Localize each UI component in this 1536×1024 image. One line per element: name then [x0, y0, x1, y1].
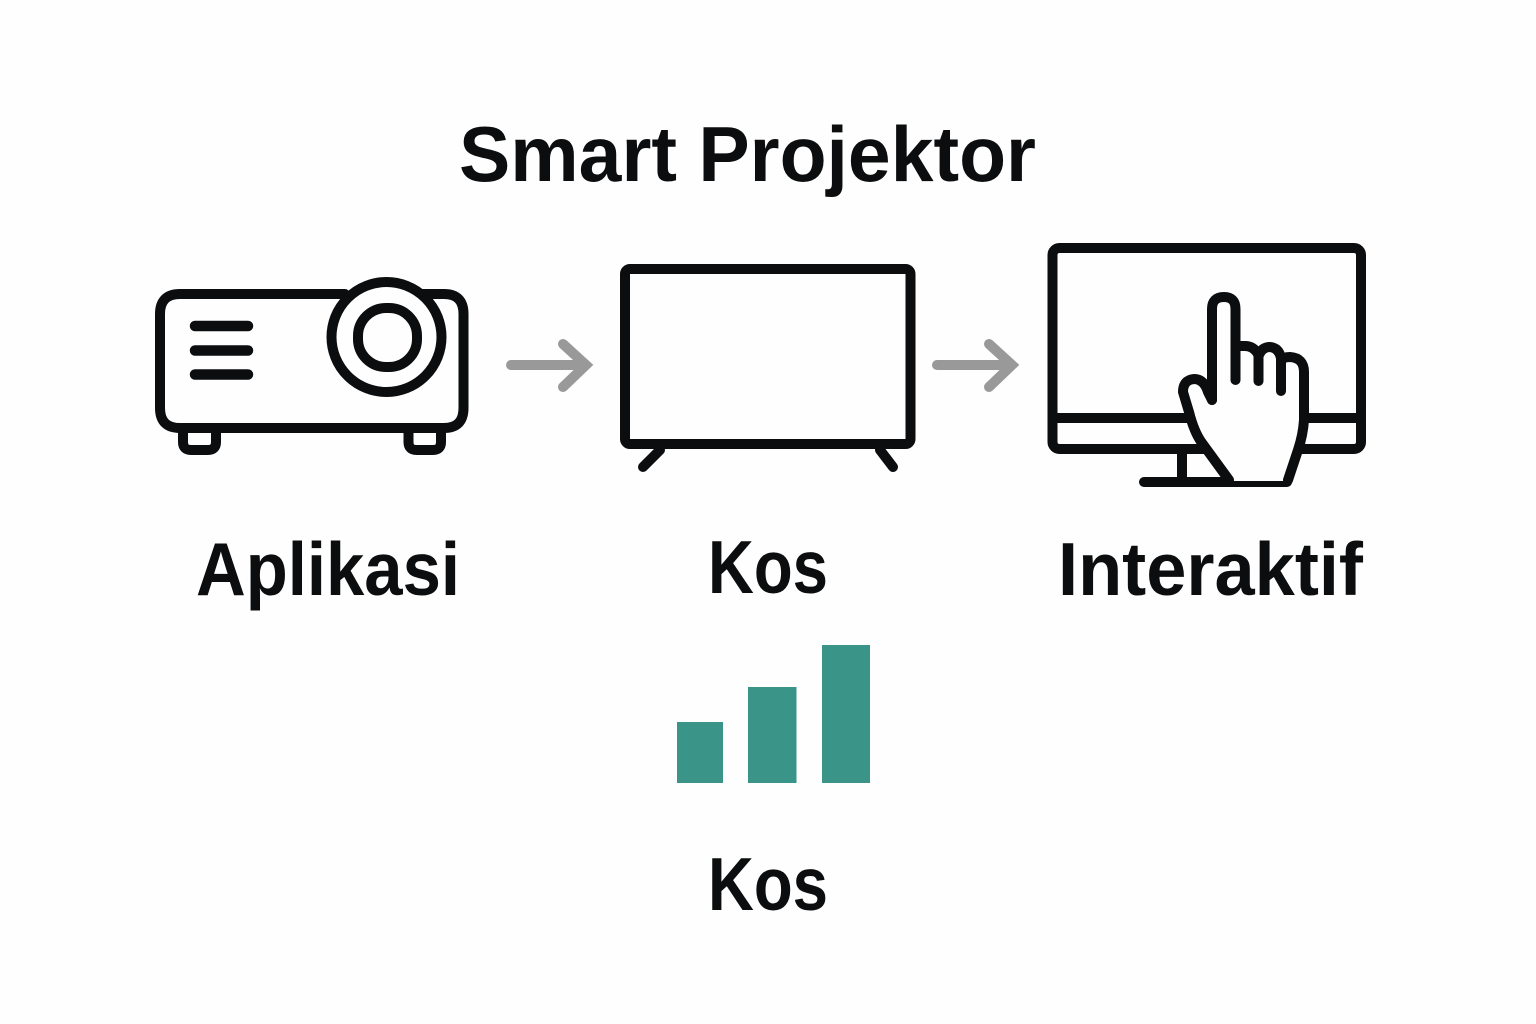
hand [1183, 297, 1304, 481]
label: Kos (screen): Kos [708, 525, 828, 609]
label: Aplikasi: Aplikasi [196, 527, 460, 611]
arrow: screen to interactive display [937, 344, 1012, 387]
icon: flat screen [625, 269, 910, 467]
arrow: projector to screen [511, 344, 586, 387]
bar chart [677, 645, 870, 783]
label: Kos (chart): Kos [708, 842, 828, 926]
icon: projector [160, 282, 464, 450]
icon: interactive touch display [1052, 248, 1361, 482]
title: Smart Projektor [459, 110, 1036, 198]
label: Interaktif: Interaktif [1058, 527, 1364, 611]
